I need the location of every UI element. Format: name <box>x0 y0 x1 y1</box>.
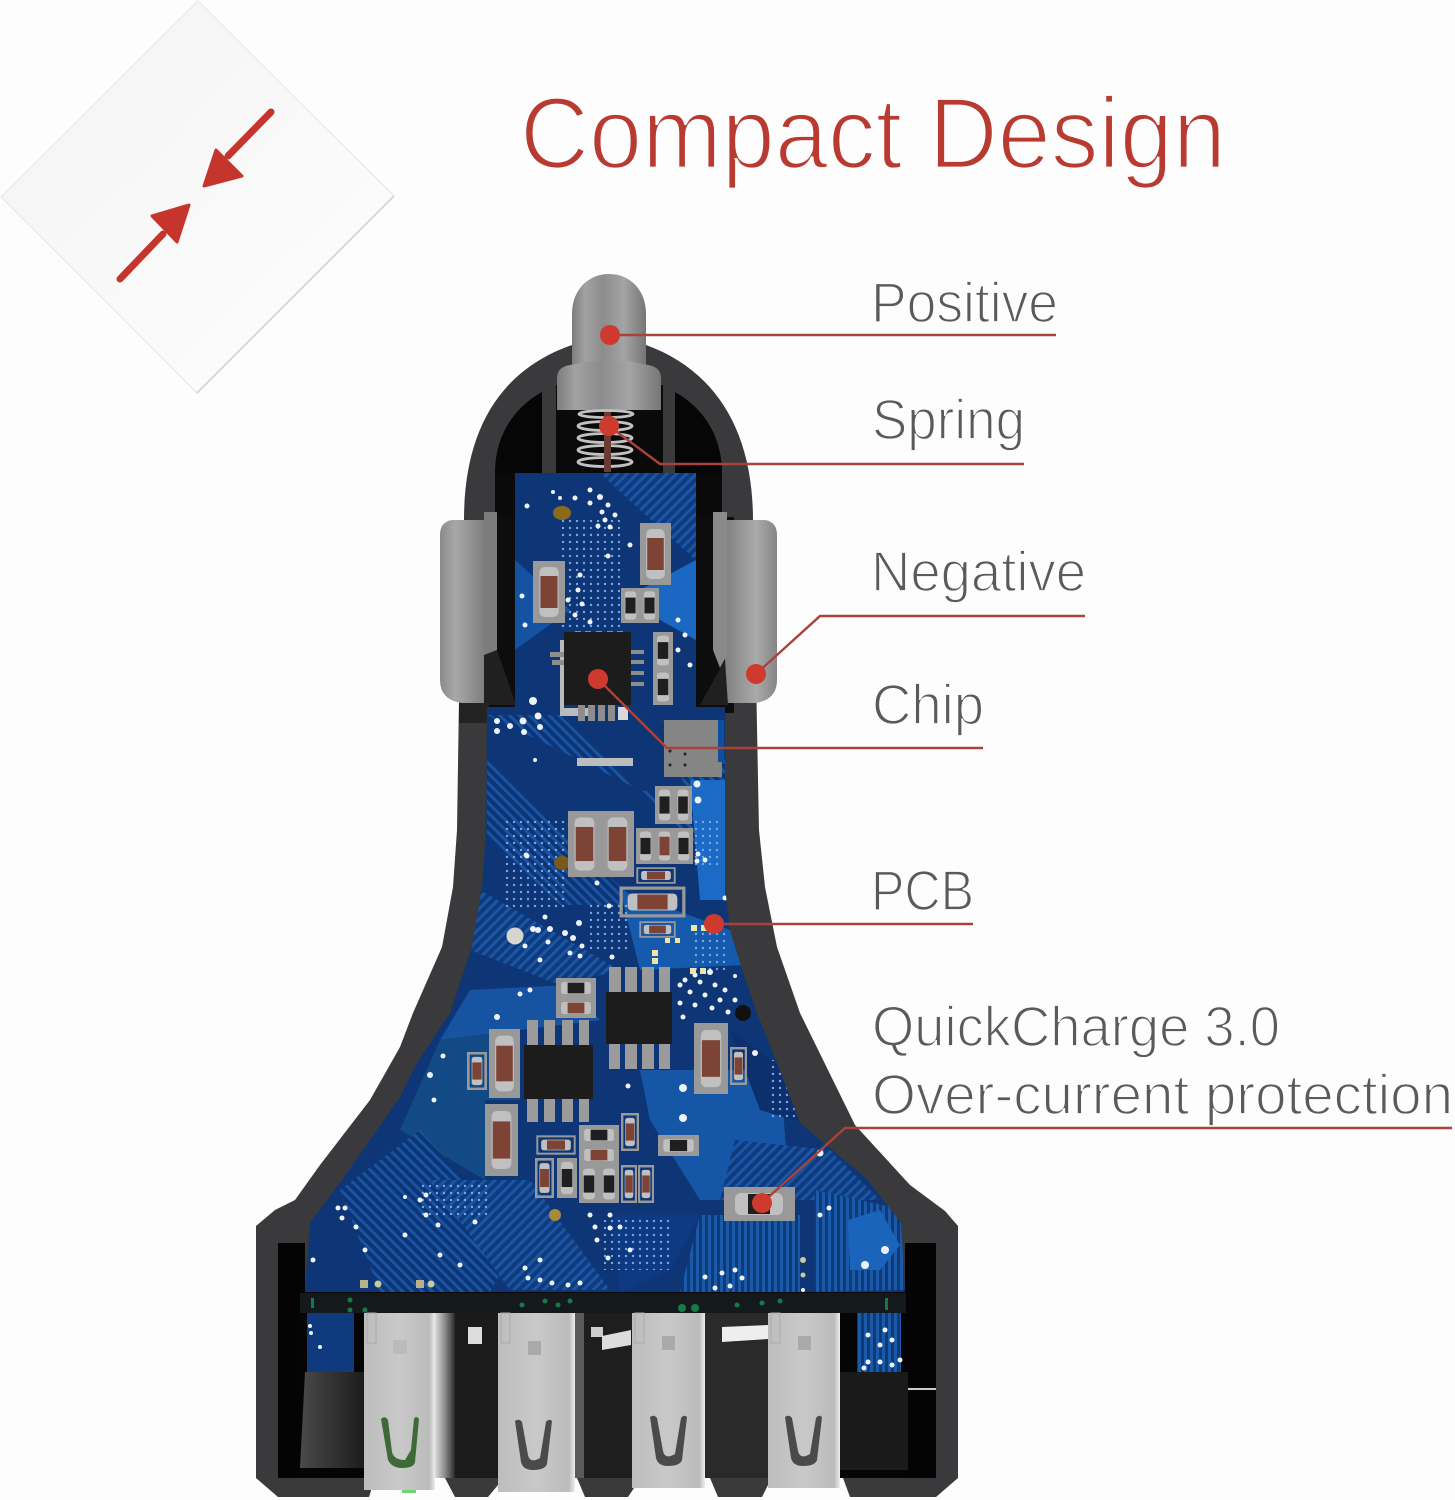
USB port 4 <box>768 1313 840 1488</box>
gold via top <box>553 506 571 520</box>
right small highlight <box>908 1388 936 1390</box>
label: Spring <box>599 388 1025 464</box>
shoulder dark lower <box>459 703 489 723</box>
gold via mid <box>554 856 570 870</box>
USB port 2 <box>498 1313 575 1492</box>
hole <box>735 1005 751 1021</box>
left contact strip <box>484 512 497 668</box>
label: Spring: Spring <box>872 388 1025 452</box>
dome interior left <box>495 392 542 473</box>
components: top PCB <box>533 523 673 705</box>
upper black cavity <box>495 473 722 523</box>
right contact <box>725 520 777 703</box>
inner case black full <box>300 1290 908 1478</box>
label: PCB <box>704 859 974 934</box>
gray chip block <box>664 720 724 777</box>
label: Chip <box>588 669 984 748</box>
label: Chip: Chip <box>872 673 984 737</box>
dome interior right <box>675 392 722 473</box>
arrow: bottom-left inward <box>120 205 189 279</box>
label: Negative <box>746 540 1086 684</box>
label: QuickCharge over-current protection: Over-current protection <box>872 1063 1453 1127</box>
spring core <box>604 412 611 472</box>
chips lower <box>524 967 672 1122</box>
PCB lower right tab <box>857 1313 902 1372</box>
pcb via fields <box>420 520 795 1270</box>
plug collar <box>557 361 661 410</box>
left contact <box>440 520 490 703</box>
car charger cutaway <box>256 274 958 1497</box>
PCB <box>300 470 910 1300</box>
plug tip <box>572 274 646 368</box>
right inner wall <box>840 1372 908 1470</box>
components: mid PCB <box>568 758 707 974</box>
components: lower PCB <box>468 978 795 1221</box>
inner case black left <box>278 1243 305 1478</box>
charger body shell <box>256 345 958 1497</box>
left inner wall <box>300 1372 364 1468</box>
USB port 3 <box>632 1313 705 1488</box>
icon: compress diamond badge <box>1 1 394 393</box>
label: QuickCharge over-current protection: QuickCharge 3.0 <box>872 995 1280 1059</box>
right contact strip <box>713 512 727 668</box>
USB port 1 <box>364 1313 435 1493</box>
label: PCB: PCB <box>871 859 974 923</box>
left contact inner wedge <box>484 650 516 705</box>
label: Negative: Negative <box>871 540 1086 604</box>
pcb base <box>300 470 910 1300</box>
pcb white solder dots <box>310 488 889 1292</box>
diamond panel <box>1 1 394 393</box>
clip area dark <box>484 517 734 713</box>
PCB bottom edge strip <box>300 1293 906 1313</box>
inner case black right <box>905 1243 936 1478</box>
pcb trace regions <box>340 473 905 1292</box>
reflective strips between USB ports <box>435 1313 768 1478</box>
spring <box>578 410 633 466</box>
arrow: top-right inward <box>204 112 271 186</box>
PCB lower left tab <box>307 1313 354 1372</box>
label: QuickCharge over-current protection <box>752 995 1453 1213</box>
title: Compact Design <box>520 78 1226 190</box>
chip <box>550 631 644 721</box>
diamond lower-right edge <box>197 196 394 393</box>
inner post <box>556 385 663 475</box>
label: Positive: Positive <box>871 271 1058 335</box>
right contact inner wedge <box>700 660 728 705</box>
label: Positive <box>600 271 1058 345</box>
